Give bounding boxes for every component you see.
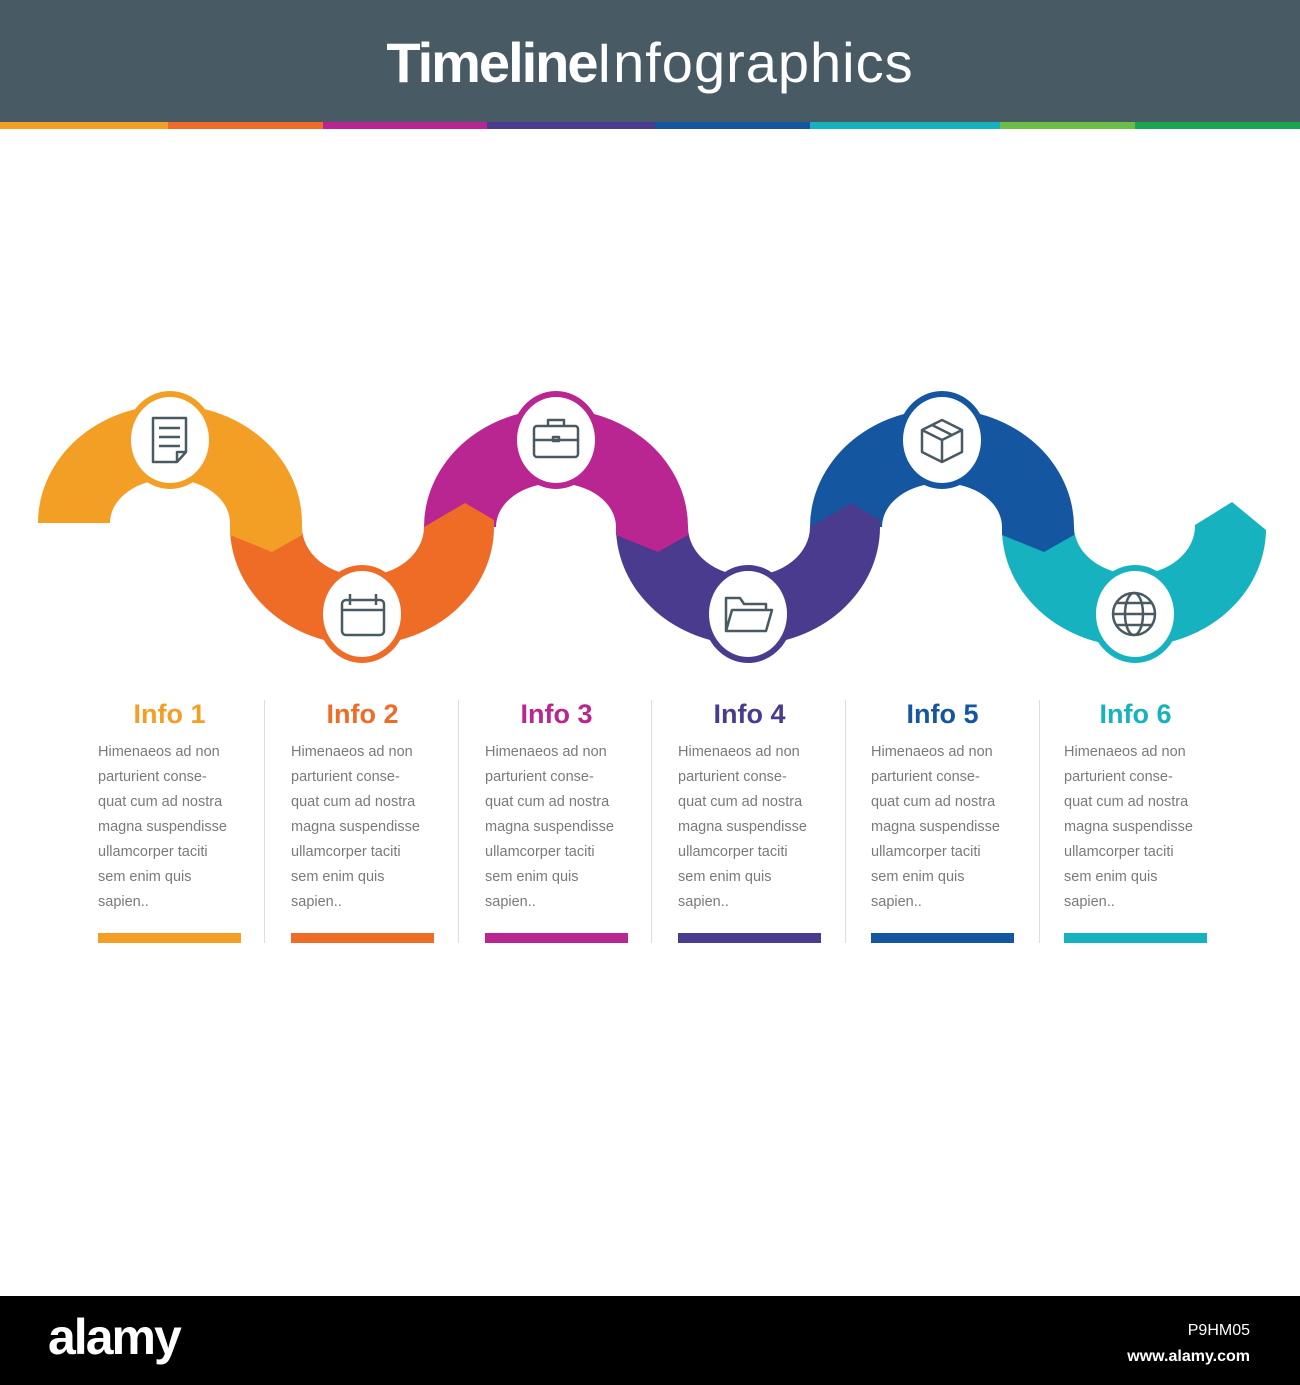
panel: info 6: parturient conse- [1064, 769, 1173, 785]
image id: P9HM05 [1188, 1322, 1250, 1339]
panel: info 1: quat cum ad nostra [98, 794, 222, 810]
icon: globe [1113, 593, 1155, 635]
footer bar [0, 1296, 1300, 1385]
color strip [0, 122, 1300, 129]
panel: info 2: sem enim quis [291, 869, 384, 885]
panel: info 6: magna suspendisse [1064, 819, 1193, 835]
panel: info 1: ullamcorper taciti [98, 844, 208, 860]
image id: www.alamy.com [1127, 1348, 1250, 1365]
panel: info 6 [1064, 699, 1207, 943]
panel: info 6: Info 6 [1100, 699, 1172, 729]
header banner [0, 0, 1300, 122]
panel: info 4: ullamcorper taciti [678, 844, 788, 860]
panel: info 4: sapien.. [678, 894, 729, 910]
icon: calendar [342, 594, 384, 635]
panel: info 2: magna suspendisse [291, 819, 420, 835]
panel: info 5: Himenaeos ad non [871, 744, 993, 760]
panel: info 4: magna suspendisse [678, 819, 807, 835]
panel: info 5 [871, 699, 1014, 943]
panel: info 2: Himenaeos ad non [291, 744, 413, 760]
wave timeline [38, 391, 1266, 663]
icon: folder [726, 598, 772, 631]
panel: info 1: sapien.. [98, 894, 149, 910]
logo: alamy [48, 1309, 180, 1365]
dividers [264, 700, 265, 943]
panel: info 3: Info 3 [520, 699, 592, 729]
panel: info 5: sem enim quis [871, 869, 964, 885]
icon: briefcase [534, 420, 578, 457]
panel: info 3: ullamcorper taciti [485, 844, 595, 860]
panel: info 2: ullamcorper taciti [291, 844, 401, 860]
panel: info 1: Himenaeos ad non [98, 744, 220, 760]
panel: info 2: sapien.. [291, 894, 342, 910]
panel: info 1: Info 1 [134, 699, 206, 729]
panel: info 4: Himenaeos ad non [678, 744, 800, 760]
panel: info 4: parturient conse- [678, 769, 787, 785]
panel: info 5: Info 5 [906, 699, 978, 729]
panel: info 6: Himenaeos ad non [1064, 744, 1186, 760]
panel: info 6: sem enim quis [1064, 869, 1157, 885]
panel: info 4: Info 4 [714, 699, 786, 729]
icon: document [153, 418, 186, 462]
panel: info 5: quat cum ad nostra [871, 794, 995, 810]
panel: info 5: magna suspendisse [871, 819, 1000, 835]
panel: info 3 [485, 699, 628, 943]
title: TimelineInfographics [386, 31, 914, 94]
panel: info 4: quat cum ad nostra [678, 794, 802, 810]
panel: info 2: quat cum ad nostra [291, 794, 415, 810]
panel: info 6: ullamcorper taciti [1064, 844, 1174, 860]
panel: info 3: quat cum ad nostra [485, 794, 609, 810]
panel: info 1 [98, 699, 241, 943]
panel: info 2: Info 2 [326, 699, 398, 729]
panel: info 6: quat cum ad nostra [1064, 794, 1188, 810]
panel: info 3: sem enim quis [485, 869, 578, 885]
panel: info 1: magna suspendisse [98, 819, 227, 835]
panel: info 2: parturient conse- [291, 769, 400, 785]
panel: info 1: parturient conse- [98, 769, 207, 785]
panel: info 3: parturient conse- [485, 769, 594, 785]
icon: box [922, 420, 962, 462]
panel: info 5: sapien.. [871, 894, 922, 910]
panel: info 6: sapien.. [1064, 894, 1115, 910]
panel: info 5: ullamcorper taciti [871, 844, 981, 860]
panel: info 4: sem enim quis [678, 869, 771, 885]
panel: info 3: sapien.. [485, 894, 536, 910]
image id [1127, 1322, 1250, 1365]
panel: info 1: sem enim quis [98, 869, 191, 885]
panel: info 2 [291, 699, 434, 943]
panel: info 3: Himenaeos ad non [485, 744, 607, 760]
panel: info 4 [678, 699, 821, 943]
panel: info 3: magna suspendisse [485, 819, 614, 835]
panel: info 5: parturient conse- [871, 769, 980, 785]
